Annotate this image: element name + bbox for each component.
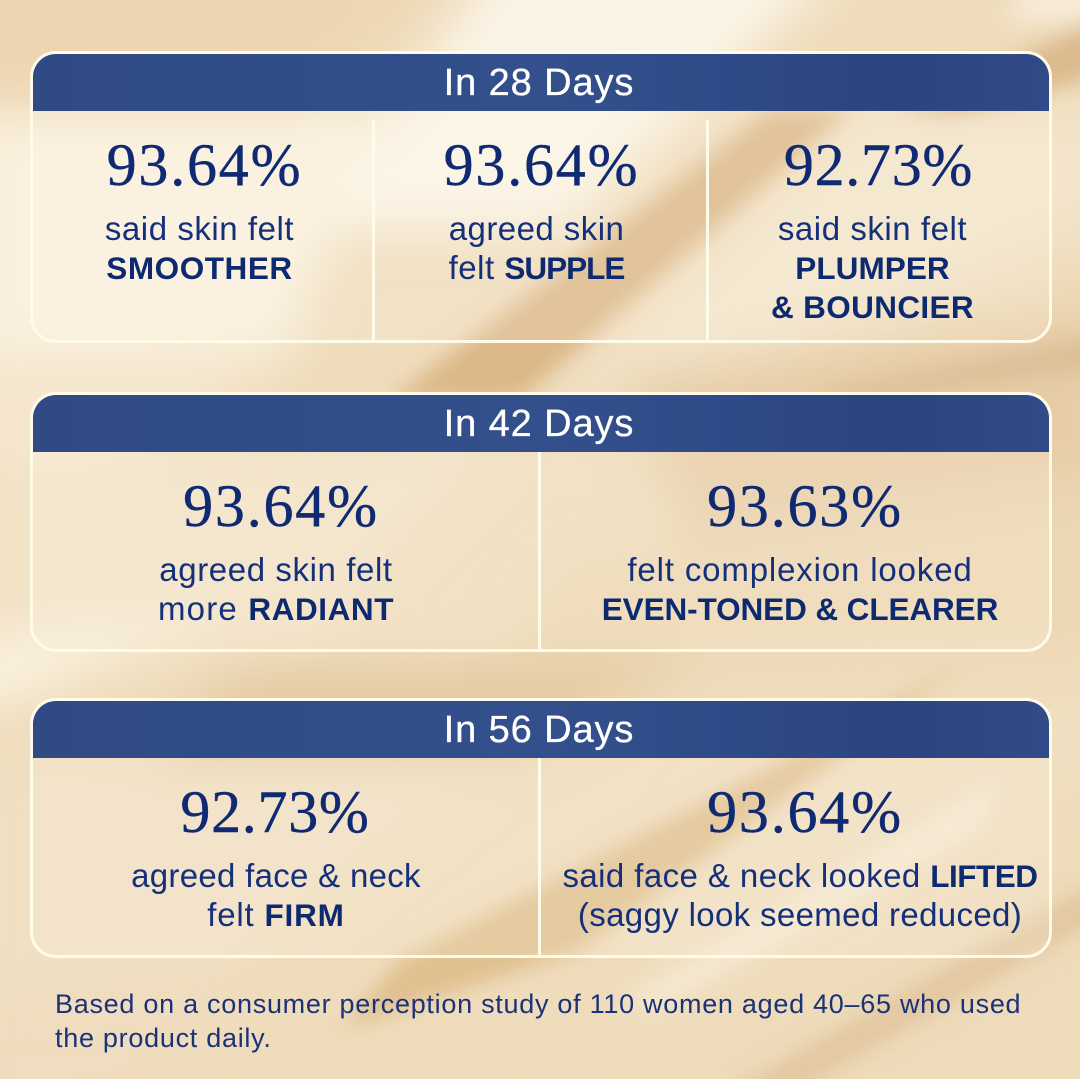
panel: In 42 Days [30, 392, 1052, 652]
stat: lifted [562, 779, 1038, 933]
stat: smoother: 93.64% [107, 132, 302, 198]
stat: plumper and bouncier: PLUMPER [795, 250, 950, 286]
stat: radiant: agreed skin felt [159, 551, 393, 588]
divider [372, 120, 375, 340]
stat: plumper and bouncier: said skin felt [778, 210, 967, 247]
panel: In 56 Days [30, 698, 1052, 958]
stat: plumper and bouncier: & BOUNCIER [771, 289, 974, 325]
stat: even-toned and clearer [602, 473, 998, 627]
panel: In 28 Days [30, 51, 1052, 343]
stat: plumper and bouncier: 92.73% [784, 132, 973, 198]
stat: supple: 93.64% [444, 132, 639, 198]
heading: In 28 Days [33, 54, 1049, 111]
heading: In 56 Days: In 56 Days [444, 709, 634, 751]
divider [706, 120, 709, 340]
stat: firm [131, 779, 421, 933]
heading: In 28 Days: In 28 Days [444, 62, 634, 104]
divider [538, 758, 541, 955]
stat: lifted: said face & neck looked LIFTED [562, 857, 1038, 894]
stat: supple: agreed skin [449, 210, 624, 247]
stat: radiant: 93.64% [183, 473, 379, 539]
stat: plumper and bouncier [771, 132, 974, 325]
footnote [55, 989, 1021, 1053]
stat: firm: 92.73% [180, 779, 370, 845]
divider [538, 452, 541, 649]
heading: In 56 Days [33, 701, 1049, 758]
stat: even-toned and clearer: 93.63% [707, 473, 903, 539]
stat: even-toned and clearer: felt complexion looked [627, 551, 973, 588]
heading: In 42 Days: In 42 Days [444, 403, 634, 445]
stat: firm: felt FIRM [207, 896, 345, 933]
stat: smoother [105, 132, 302, 286]
footnote: Based on a consumer perception study of 110 women aged 40–65 who used [55, 989, 1021, 1019]
stat: supple [444, 132, 639, 286]
stat: lifted: 93.64% [707, 779, 903, 845]
stat: smoother: SMOOTHER [106, 250, 293, 286]
stat: lifted: (saggy look seemed reduced) [578, 896, 1022, 933]
stat: firm: agreed face & neck [131, 857, 421, 894]
footnote: the product daily. [55, 1023, 272, 1053]
stat: radiant [158, 473, 394, 627]
heading: In 42 Days [33, 395, 1049, 452]
stat: smoother: said skin felt [105, 210, 294, 247]
stat: radiant: more RADIANT [158, 590, 394, 627]
stat: supple: felt SUPPLE [449, 249, 624, 286]
stat: even-toned and clearer: EVEN-TONED & CLEARER [602, 591, 998, 627]
